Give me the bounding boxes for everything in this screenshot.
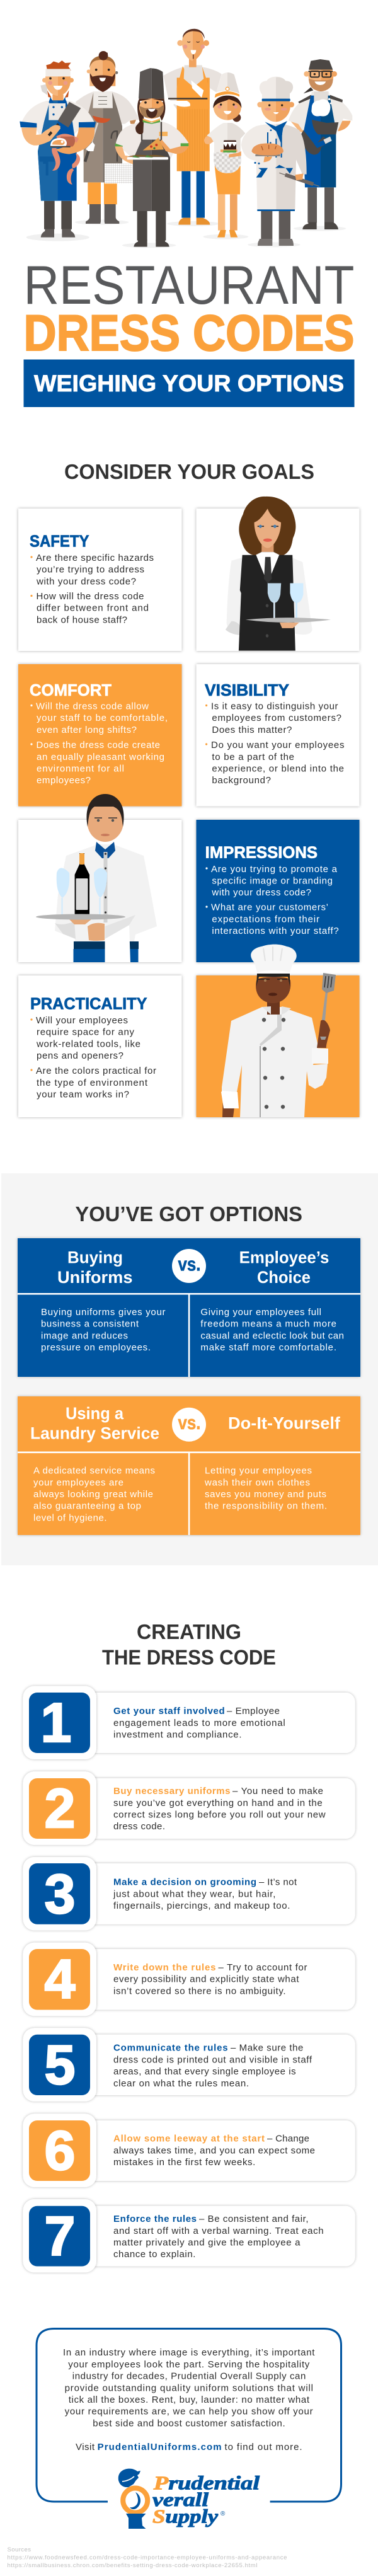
step 1: engagement leads to more emotional (113, 1718, 285, 1728)
heading: safety: SAFETY (30, 533, 89, 551)
bullet list: safety: differ between front and (37, 603, 149, 614)
step 2 (23, 1771, 355, 1845)
step 4: – Try to account for (218, 1962, 307, 1973)
step 6: Allow some leeway at the start (113, 2134, 265, 2144)
step 6: 6 (45, 2119, 75, 2182)
panel: laundry service vs do-it-yourself (18, 1396, 360, 1535)
step 5: – Make sure the (231, 2043, 303, 2054)
character: tall waiter with orange apron (163, 29, 222, 226)
step 5: 5 (45, 2033, 75, 2096)
text: employee's choice description: Giving your employees full (200, 1307, 321, 1318)
heading: visibility: VISIBILITY (205, 682, 289, 699)
option: employee's choice: Choice (257, 1268, 311, 1287)
step 2: sure you’ve got everything on hand and in the (113, 1798, 323, 1808)
option: buying uniforms: Buying (67, 1248, 123, 1267)
vs badge: vs. (178, 1412, 200, 1434)
closing text: PrudentialUniforms.com (98, 2442, 222, 2452)
panel: practicality (18, 975, 181, 1117)
bullet list: impressions: What are your customers’ (211, 902, 328, 913)
heading: impressions: IMPRESSIONS (205, 844, 318, 862)
bullet list: safety: you’re trying to address (37, 565, 144, 575)
heading: creating the dress code (102, 1620, 276, 1669)
bullet list: comfort (30, 701, 168, 786)
text: buying uniforms description (41, 1307, 165, 1353)
bullet list: practicality: the type of environment (37, 1078, 148, 1088)
text: buying uniforms description: business a consistent (41, 1319, 139, 1330)
option: do-it-yourself: Do-It-Yourself (228, 1414, 341, 1433)
step 1: – Employee (227, 1706, 280, 1716)
sources: Sources (8, 2546, 31, 2553)
text: buying uniforms description: image and reduces (41, 1331, 128, 1341)
text: laundry service description: A dedicated service means (33, 1466, 155, 1476)
step 7: – Be consistent and fair, (199, 2214, 309, 2224)
option: using a laundry service: Using a (66, 1404, 124, 1423)
closing text: your requirements are, we can help you show off your (65, 2406, 313, 2417)
bullet list: practicality: pens and openers? (37, 1050, 123, 1061)
option: employee's choice (239, 1248, 329, 1287)
bullet list: visibility: Is it easy to distinguish your (211, 701, 338, 711)
step 2: 2 (45, 1777, 75, 1839)
bullet list: visibility: to be a part of the (212, 752, 294, 762)
step 4: Write down the rules (113, 1962, 215, 1973)
step 2: Buy necessary uniforms (113, 1786, 231, 1797)
step 3: – It’s not (259, 1877, 297, 1887)
bullet list: visibility: Does this matter? (212, 725, 292, 735)
text: do-it-yourself description: Letting your employees (205, 1466, 312, 1476)
option: employee's choice: Employee’s (239, 1248, 329, 1267)
step 4: 4 (45, 1948, 76, 2010)
text: laundry service description: also guaranteeing a top (33, 1501, 141, 1512)
step 1: 1 (41, 1691, 71, 1754)
bullet list: practicality: Will your employees (36, 1015, 128, 1026)
bullet list: visibility: employees from customers? (212, 713, 341, 723)
text: buying uniforms description: Buying uniforms gives your (41, 1307, 165, 1318)
text: do-it-yourself description (204, 1466, 327, 1512)
heading: creating the dress code: THE DRESS CODE (102, 1646, 276, 1669)
bullet list: practicality: require space for any (37, 1027, 135, 1038)
sources: https://www.foodnewsfeed.com/dress-code-importance-employee-uniforms-and-appearance (8, 2555, 287, 2561)
bullet list: safety: with your dress code? (36, 576, 136, 587)
step 4: every possibility and explicitly state what (113, 1974, 299, 1985)
character: chef with glasses and blue apron (289, 59, 352, 231)
option: using a laundry service: Laundry Service (30, 1424, 159, 1443)
step 7: matter privately and give the employee a (113, 2238, 301, 2248)
vs badge: vs. (178, 1253, 200, 1275)
step 3: fingernails, piercings, and makeup too. (113, 1900, 290, 1911)
closing text: In an industry where image is everything, it’s important (63, 2347, 315, 2358)
closing text: tick all the boxes. Rent, buy, launder: no matter what (69, 2395, 310, 2405)
bullet list: impressions: interactions with your staff? (212, 926, 339, 936)
character: pastry chef woman (203, 72, 248, 239)
logo: Prudential Overall Supply: verall (152, 2488, 209, 2510)
option: buying uniforms (57, 1248, 132, 1287)
section background: options (1, 1173, 378, 1565)
subtitle banner: WEIGHING YOUR OPTIONS (34, 370, 344, 396)
bullet list: comfort: an equally pleasant working (37, 752, 164, 762)
step 3: 3 (45, 1863, 75, 1925)
vs badge (172, 1408, 206, 1442)
panel: buying uniforms vs employee's choice (18, 1238, 360, 1377)
step 7: chance to explain. (113, 2249, 195, 2260)
step 3: Make a decision on grooming (113, 1877, 256, 1887)
text: employee's choice description: make staff more comfortable. (200, 1342, 336, 1353)
bullet list: impressions: Are you trying to promote a (211, 864, 338, 875)
panel: chef illustration (197, 945, 359, 1117)
step 5 (23, 2028, 355, 2102)
bullet list: practicality (30, 1015, 156, 1100)
bullet list: impressions: expectations from their (212, 914, 319, 925)
text: do-it-yourself description: the responsibility on them. (205, 1501, 327, 1512)
step 1: Get your staff involved (113, 1706, 225, 1716)
bullet list: practicality: work-related tools, like (36, 1038, 140, 1049)
bullet list: safety: back of house staff? (37, 614, 127, 625)
bullet list: visibility: Do you want your employees (211, 740, 344, 750)
panel: safety (18, 509, 181, 651)
bullet list: visibility: background? (212, 775, 271, 786)
panel: impressions (197, 820, 359, 962)
character: chef with white hat and blue scarf (241, 77, 319, 247)
bullet list: visibility (205, 701, 344, 786)
step 2: – You need to make (232, 1786, 323, 1797)
option: buying uniforms: Uniforms (57, 1268, 132, 1287)
step 5: Communicate the rules (113, 2043, 228, 2054)
text: employee's choice description: casual and eclectic look but can (200, 1331, 344, 1341)
heading: creating the dress code: CREATING (137, 1620, 241, 1643)
closing text: best side and boost customer satisfaction. (93, 2418, 285, 2429)
text: buying uniforms description: pressure on employees. (41, 1342, 151, 1353)
bullet list: impressions (205, 864, 339, 936)
text: laundry service description: level of hygiene. (33, 1512, 107, 1523)
icon: chef holding a spatula (221, 945, 336, 1117)
text: laundry service description: always looking great while (33, 1489, 153, 1500)
vs badge (172, 1249, 206, 1283)
heading: practicality: PRACTICALITY (30, 996, 147, 1013)
step 1 (23, 1686, 355, 1759)
step 3: just about what they wear, but hair, (113, 1889, 275, 1899)
logo: Prudential Overall Supply (118, 2469, 260, 2529)
heading: comfort: COMFORT (30, 682, 112, 699)
step 3 (23, 1857, 355, 1930)
step 7: Enforce the rules (113, 2214, 197, 2224)
icon: waitress holding a tray (226, 497, 331, 651)
bullet list: impressions: with your dress code? (211, 887, 311, 898)
closing text: Visit (76, 2442, 95, 2452)
bullet list: comfort: Does the dress code create (37, 740, 160, 750)
subtitle banner (24, 359, 354, 407)
bullet list: practicality: your team works in? (37, 1090, 129, 1100)
bullet list: comfort: your staff to be comfortable, (37, 713, 168, 723)
bullet list: safety: Are there specific hazards (36, 553, 154, 563)
bullet list: safety (30, 553, 154, 625)
panel: waitress illustration (197, 497, 359, 651)
bullet list: visibility: experience, or blend into the (212, 764, 344, 774)
step 6 (23, 2113, 355, 2187)
sources (8, 2546, 287, 2569)
step 6: – Change (267, 2134, 309, 2144)
bullet list: practicality: Are the colors practical for (36, 1066, 156, 1076)
closing panel (37, 2329, 341, 2529)
text: laundry service description (33, 1466, 155, 1523)
step 5: dress code is printed out and visible in staff (113, 2054, 312, 2065)
bullet list: comfort: employees? (37, 775, 91, 786)
step 4 (23, 1943, 355, 2016)
text: laundry service description: your employees are (33, 1477, 123, 1488)
panel: comfort (18, 664, 181, 807)
logo: Prudential Overall Supply: Supply (152, 2505, 218, 2527)
text: employee's choice description (200, 1307, 344, 1353)
step 5: clear on what the rules mean. (113, 2078, 249, 2089)
step 7: 7 (45, 2205, 75, 2267)
text: do-it-yourself description: saves you money and puts (205, 1489, 326, 1500)
step 4: isn’t covered so there is no ambiguity. (113, 1986, 286, 1996)
step 1: investment and compliance. (113, 1730, 242, 1740)
hero illustration: restaurant staff (20, 29, 352, 248)
panel: waiter illustration (18, 794, 181, 962)
character: chef with tall black hat (115, 68, 188, 248)
bullet list: comfort: even after long shifts? (37, 725, 137, 735)
closing text: provide outstanding quality uniform solutions that will (65, 2383, 313, 2393)
panel: visibility (197, 664, 359, 807)
closing text: your employees look the part. Serving the hospitality (68, 2359, 310, 2370)
closing text: industry for decades, Prudential Overall Supply can (72, 2371, 306, 2382)
closing text: to find out more. (224, 2442, 302, 2452)
icon: waiter with wine bottle (36, 794, 157, 962)
logo: Prudential Overall Supply: ® (220, 2510, 226, 2517)
heading: you've got options: YOU’VE GOT OPTIONS (75, 1202, 302, 1226)
text: do-it-yourself description: wash their own clothes (204, 1477, 310, 1488)
step 5: areas, and that every single employee is (113, 2066, 296, 2077)
step 7 (23, 2199, 355, 2272)
sources: https://smallbusiness.chron.com/benefits-setting-dress-code-workplace-22655.html (8, 2562, 257, 2569)
bullet list: impressions: specific image or branding (212, 876, 333, 887)
character: butcher with blue apron (20, 60, 96, 241)
option: using a laundry service (30, 1404, 159, 1443)
logo: Prudential Overall Supply: Prudential (153, 2471, 260, 2494)
step 2: dress code. (113, 1821, 165, 1832)
bullet list: comfort: environment for all (37, 764, 124, 774)
text: employee's choice description: freedom means a much more (200, 1319, 336, 1330)
character: bearded chef with grey apron (75, 51, 139, 225)
closing text (63, 2347, 315, 2452)
step 2: correct sizes long before you roll out your new (113, 1810, 326, 1820)
step 6: always takes time, and you can expect some (113, 2145, 315, 2156)
step 7: and start off with a verbal warning. Treat each (113, 2226, 324, 2236)
heading: consider your goals: CONSIDER YOUR GOALS (64, 460, 314, 483)
bullet list: safety: How will the dress code (37, 591, 144, 602)
step 6: mistakes in the first few weeks. (113, 2157, 255, 2168)
bullet list: comfort: Will the dress code allow (36, 701, 149, 711)
